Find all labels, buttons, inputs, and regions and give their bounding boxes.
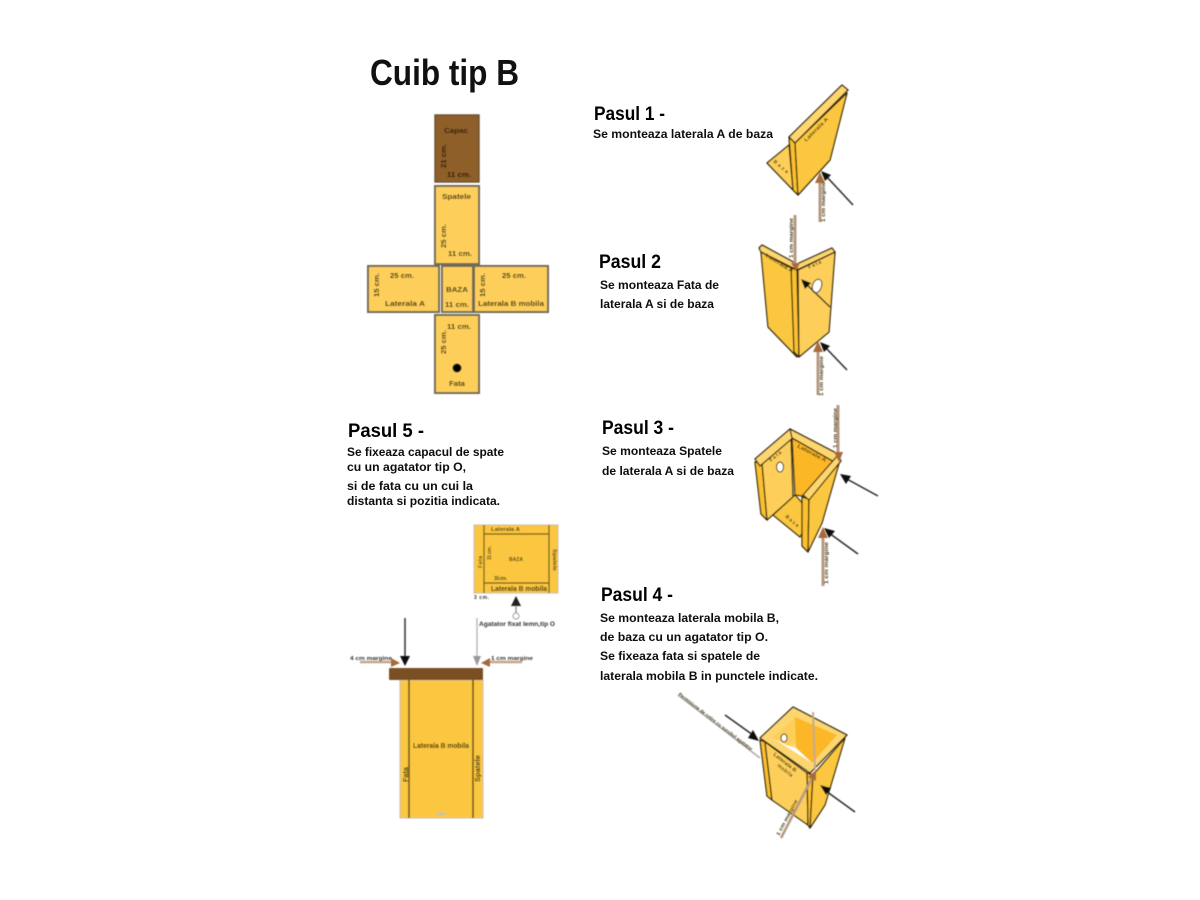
step 4 illustration: mobila [776,763,794,779]
diagram: unfolded nest net [368,115,548,393]
diagram: base top view: Laterala B mobila [491,586,547,593]
panel: Capac: 11 cm. [447,172,471,179]
panel: Laterala A [368,266,439,312]
step 4 illustration: Permisiune de rotire cu surubul agatator [677,692,753,753]
diagram: assembled nest side view [389,668,483,818]
step 3 illustration: Laterala A [796,443,828,464]
arrow: hanger pointing to base: Agatator fixat lemn,tip O [479,622,555,628]
step 1 illustration: 1 cm margine [821,182,827,222]
step 5 text: cu un agatator tip O, [347,460,466,474]
panel: Baza [442,266,473,312]
step 1 heading: Pasul 1 - [594,104,665,125]
step 3 illustration: 1 cm margine [824,542,830,584]
panel: Fata [435,315,479,393]
diagram: base top view [474,525,558,601]
panel: Laterala B mobila [474,266,548,312]
step 5 text [347,445,504,508]
arrows: nail and hanger positions on lid: 1 cm margine [491,656,533,662]
step 2 heading: Pasul 2 [599,252,661,273]
panel: Spatele: Spatele [442,194,471,201]
panel: Laterala A: Laterala A [385,301,425,308]
panel: Laterala A: 25 cm. [390,273,414,280]
step 4 heading: Pasul 4 - [601,585,673,606]
step 4 illustration [677,692,855,838]
step 1 illustration: Laterala A [803,116,830,143]
arrows: nail and hanger positions on lid: 4 cm margine [350,656,392,662]
step 1 text: Se monteaza laterala A de baza [593,127,773,141]
diagram: base top view: 3 cm. [474,595,490,601]
diagram: base top view: Fata [478,556,484,568]
step 2 text: Se monteaza Fata de [600,278,719,292]
panel: Capac: Capac [444,128,468,135]
step 4 text: de baza cu un agatator tip O. [600,630,768,644]
step 3 heading: Pasul 3 - [602,418,674,439]
step 2 illustration [759,215,847,396]
title: Cuib tip B [370,52,519,93]
panel: Spatele: 11 cm. [448,251,472,258]
step 3 illustration [755,405,878,586]
diagram: assembled nest side view: Laterala B mobila [413,743,469,750]
panel: Capac: 21 cm. [441,144,448,168]
diagram: assembled nest side view: Fata [403,767,410,782]
diagram: assembled nest side view: Spatele [475,755,482,782]
step 3 text: Se monteaza Spatele [602,444,722,458]
lid [389,668,483,680]
step 2 illustration: Fata [807,259,823,271]
panel: Spatele [435,186,479,264]
step 3 illustration: 1 cm margine [833,408,839,448]
step 2 illustration: 1 cm margine [789,218,795,258]
panel: Baza: BAZA [446,287,468,294]
step 3 text: de laterala A si de baza [602,464,734,478]
diagram: base top view: BAZA [509,557,523,563]
step 5 text: distanta si pozitia indicata. [347,494,500,508]
panel: Laterala A: 15 cm. [374,273,381,297]
step 1 illustration [767,85,853,222]
step 2 text: laterala A si de baza [600,297,714,311]
panel: Fata: 25 cm. [441,330,448,354]
step 5 heading: Pasul 5 - [348,421,424,442]
step 4 text: Se monteaza laterala mobila B, [600,611,779,625]
step 4 text [600,611,818,683]
step 5 text: si de fata cu un cui la [347,479,473,493]
panel: Capac [435,115,479,182]
step 4 text: Se fixeaza fata si spatele de [600,649,760,663]
step 2 illustration: 1 cm margine [819,356,825,396]
arrows: nail and hanger positions on lid [350,618,533,667]
step 4 text: laterala mobila B in punctele indicate. [600,669,818,683]
step 3 illustration: Baza [784,514,800,529]
panel: Spatele: 25 cm. [441,224,448,248]
diagram: base top view: 15 cm. [494,576,508,582]
step 3 illustration: Fata [768,450,783,464]
step 2 text [600,278,719,311]
diagram: base top view: Spatele [551,549,557,571]
panel: Laterala B mobila: 25 cm. [502,273,526,280]
diagram: base top view: 11 cm. [487,545,493,560]
panel: Baza: 11 cm. [445,302,469,309]
arrow: hanger pointing to base [479,596,555,628]
panel: Fata: 11 cm. [447,324,471,331]
step 3 text [602,444,734,478]
step 4 illustration: Laterala B [772,752,798,774]
step 2 illustration: Laterala A [764,253,795,275]
panel: Laterala B mobila: 15 cm. [480,273,487,297]
panel: Fata: Fata [449,381,465,388]
step 4 illustration: 1 cm margine [775,799,800,837]
step 1 illustration: Baza [772,159,790,175]
panel: Laterala B mobila: Laterala B mobila [478,301,544,308]
step 5 text: Se fixeaza capacul de spate [347,445,504,459]
diagram: base top view: Laterala A [491,527,520,533]
